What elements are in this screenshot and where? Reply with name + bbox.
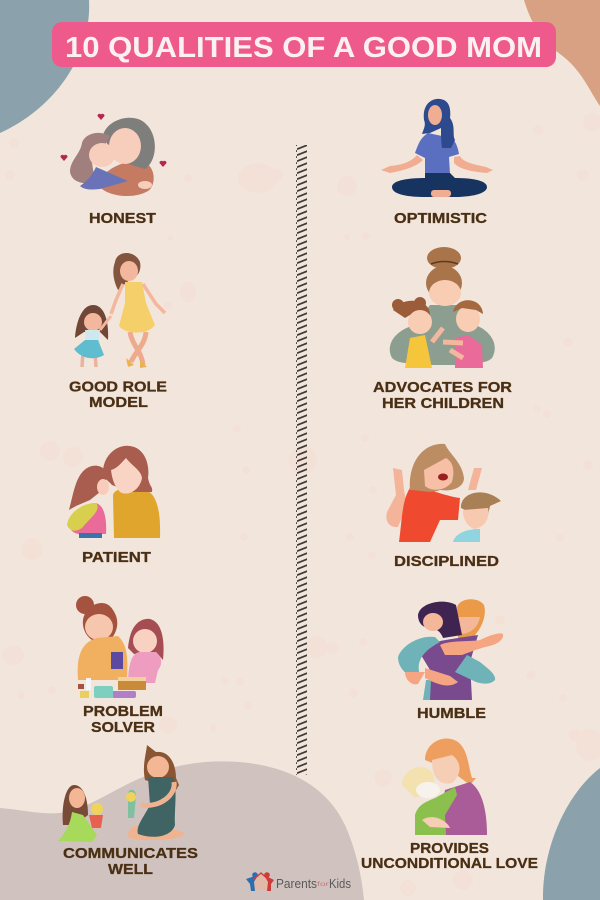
panel: problem solver: [76, 596, 164, 736]
label line two: HER CHILDREN: [382, 395, 504, 412]
label line two: SOLVER: [91, 719, 155, 736]
logo connector: for: [317, 882, 329, 888]
divider: [296, 145, 307, 775]
icon: mother and daughter playing with dolls: [58, 745, 184, 842]
corner shape: top left: [0, 0, 89, 133]
label: ADVOCATES FOR: [373, 379, 512, 396]
label line two: UNCONDITIONAL LOVE: [361, 855, 538, 872]
panel: optimistic: [381, 99, 493, 227]
label: DISCIPLINED: [394, 553, 499, 570]
panel: communicates well: [58, 745, 198, 878]
label: PROBLEM: [83, 703, 163, 720]
icon: upset mother and boy: [386, 444, 501, 542]
icon: woman meditating: [381, 99, 493, 197]
icon: two women hugging: [398, 599, 503, 700]
label line two: WELL: [108, 861, 153, 878]
icon: mother and daughter whispering: [67, 446, 160, 538]
panel: honest: [60, 114, 167, 227]
label: COMMUNICATES: [63, 845, 198, 862]
title: 10 QUALITIES OF A GOOD MOM: [65, 32, 542, 64]
label: PATIENT: [82, 549, 151, 566]
panel: good role model: [69, 253, 167, 411]
label: GOOD ROLE: [69, 378, 167, 396]
label: OPTIMISTIC: [394, 210, 487, 227]
title banner: [52, 22, 556, 67]
icon: mother embracing child: [402, 738, 487, 835]
panel: advocates for her children: [373, 247, 512, 412]
logo: Parents for Kids: [246, 872, 351, 891]
panel: disciplined: [386, 444, 501, 570]
panel: humble: [398, 599, 503, 722]
icon: family house: [246, 872, 274, 891]
label: HUMBLE: [417, 705, 486, 722]
icon: mother hugging two children: [390, 247, 495, 368]
label: PROVIDES: [410, 840, 489, 857]
corner shape: top right: [524, 0, 600, 106]
icon: hearts: [60, 114, 167, 167]
corner shape: bottom right: [543, 768, 600, 900]
label: HONEST: [89, 210, 156, 227]
panel: provides unconditional love: [361, 738, 538, 872]
panel: patient: [67, 446, 160, 566]
icon: mother and child hug: [60, 114, 167, 196]
label line two: MODEL: [89, 394, 148, 411]
logo text: Parents: [276, 877, 317, 891]
icon: mother and daughter walking: [74, 253, 165, 368]
logo text two: Kids: [329, 877, 351, 891]
corner shape: bottom left: [0, 761, 364, 900]
icon: mother and daughter crafting: [76, 596, 164, 698]
